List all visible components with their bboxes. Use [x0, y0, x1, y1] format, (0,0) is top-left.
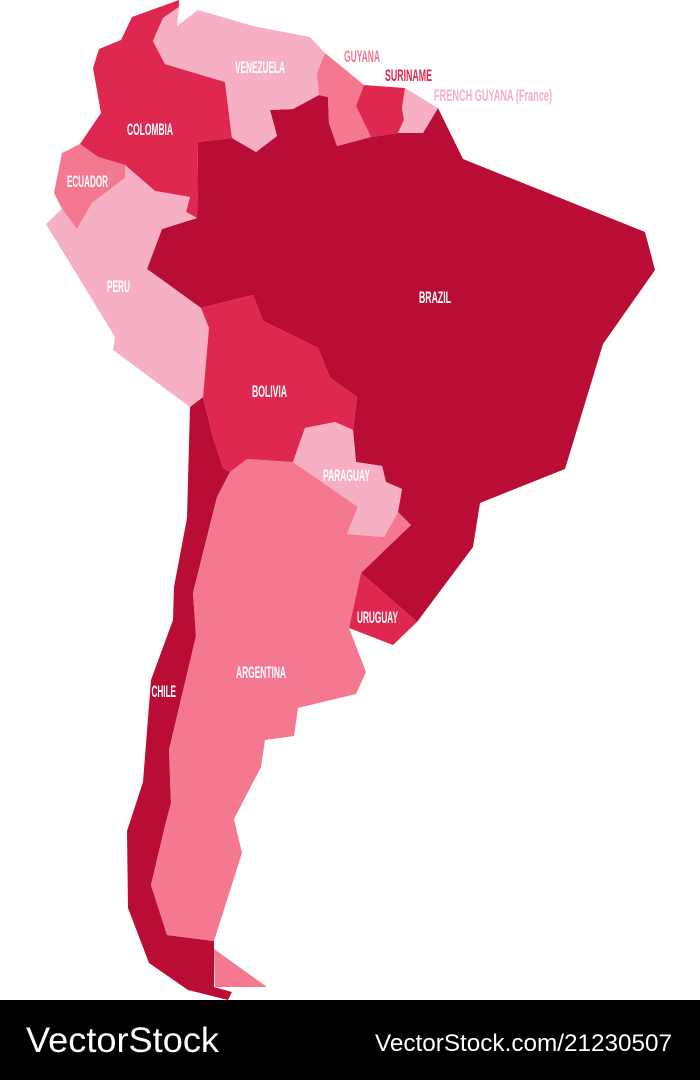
country: Uruguay [349, 573, 417, 645]
country: Paraguay [293, 422, 402, 537]
label: Argentina: ARGENTINA [236, 664, 286, 682]
country: Guyana [317, 53, 371, 146]
labels: country names: CHILE [152, 683, 176, 701]
country: Venezuela [153, 7, 325, 152]
footer: image URL text: VectorStock.com/21230507 [375, 1030, 672, 1057]
footer bar [0, 1000, 700, 1080]
country: Colombia [80, 0, 232, 218]
label: French Guyana: FRENCH GUYANA (France) [434, 87, 552, 105]
labels: country names [67, 48, 552, 701]
label: Suriname: SURINAME [385, 67, 432, 85]
label: Brazil: BRAZIL [419, 289, 451, 307]
country: Argentina [151, 459, 411, 941]
label: Paraguay: PARAGUAY [323, 467, 370, 485]
country: Peru [46, 165, 209, 407]
country: Suriname [356, 85, 405, 137]
labels: country names: ECUADOR [67, 173, 108, 191]
label: Venezuela: VENEZUELA [235, 59, 285, 77]
country: Bolivia [201, 295, 357, 472]
label: Colombia: COLOMBIA [127, 121, 173, 139]
label: Bolivia: BOLIVIA [252, 383, 287, 401]
country: Argentina, Tierra del Fuego [214, 949, 267, 987]
country: Brazil [147, 95, 655, 622]
label: Uruguay: URUGUAY [357, 609, 398, 627]
label: Peru: PERU [107, 278, 130, 296]
label: Guyana: GUYANA [344, 48, 380, 66]
country: French Guyana [398, 88, 438, 133]
footer: VectorStock logo text: VectorStock [26, 1021, 220, 1060]
country: Chile [127, 397, 232, 1000]
country: Ecuador [54, 144, 125, 229]
